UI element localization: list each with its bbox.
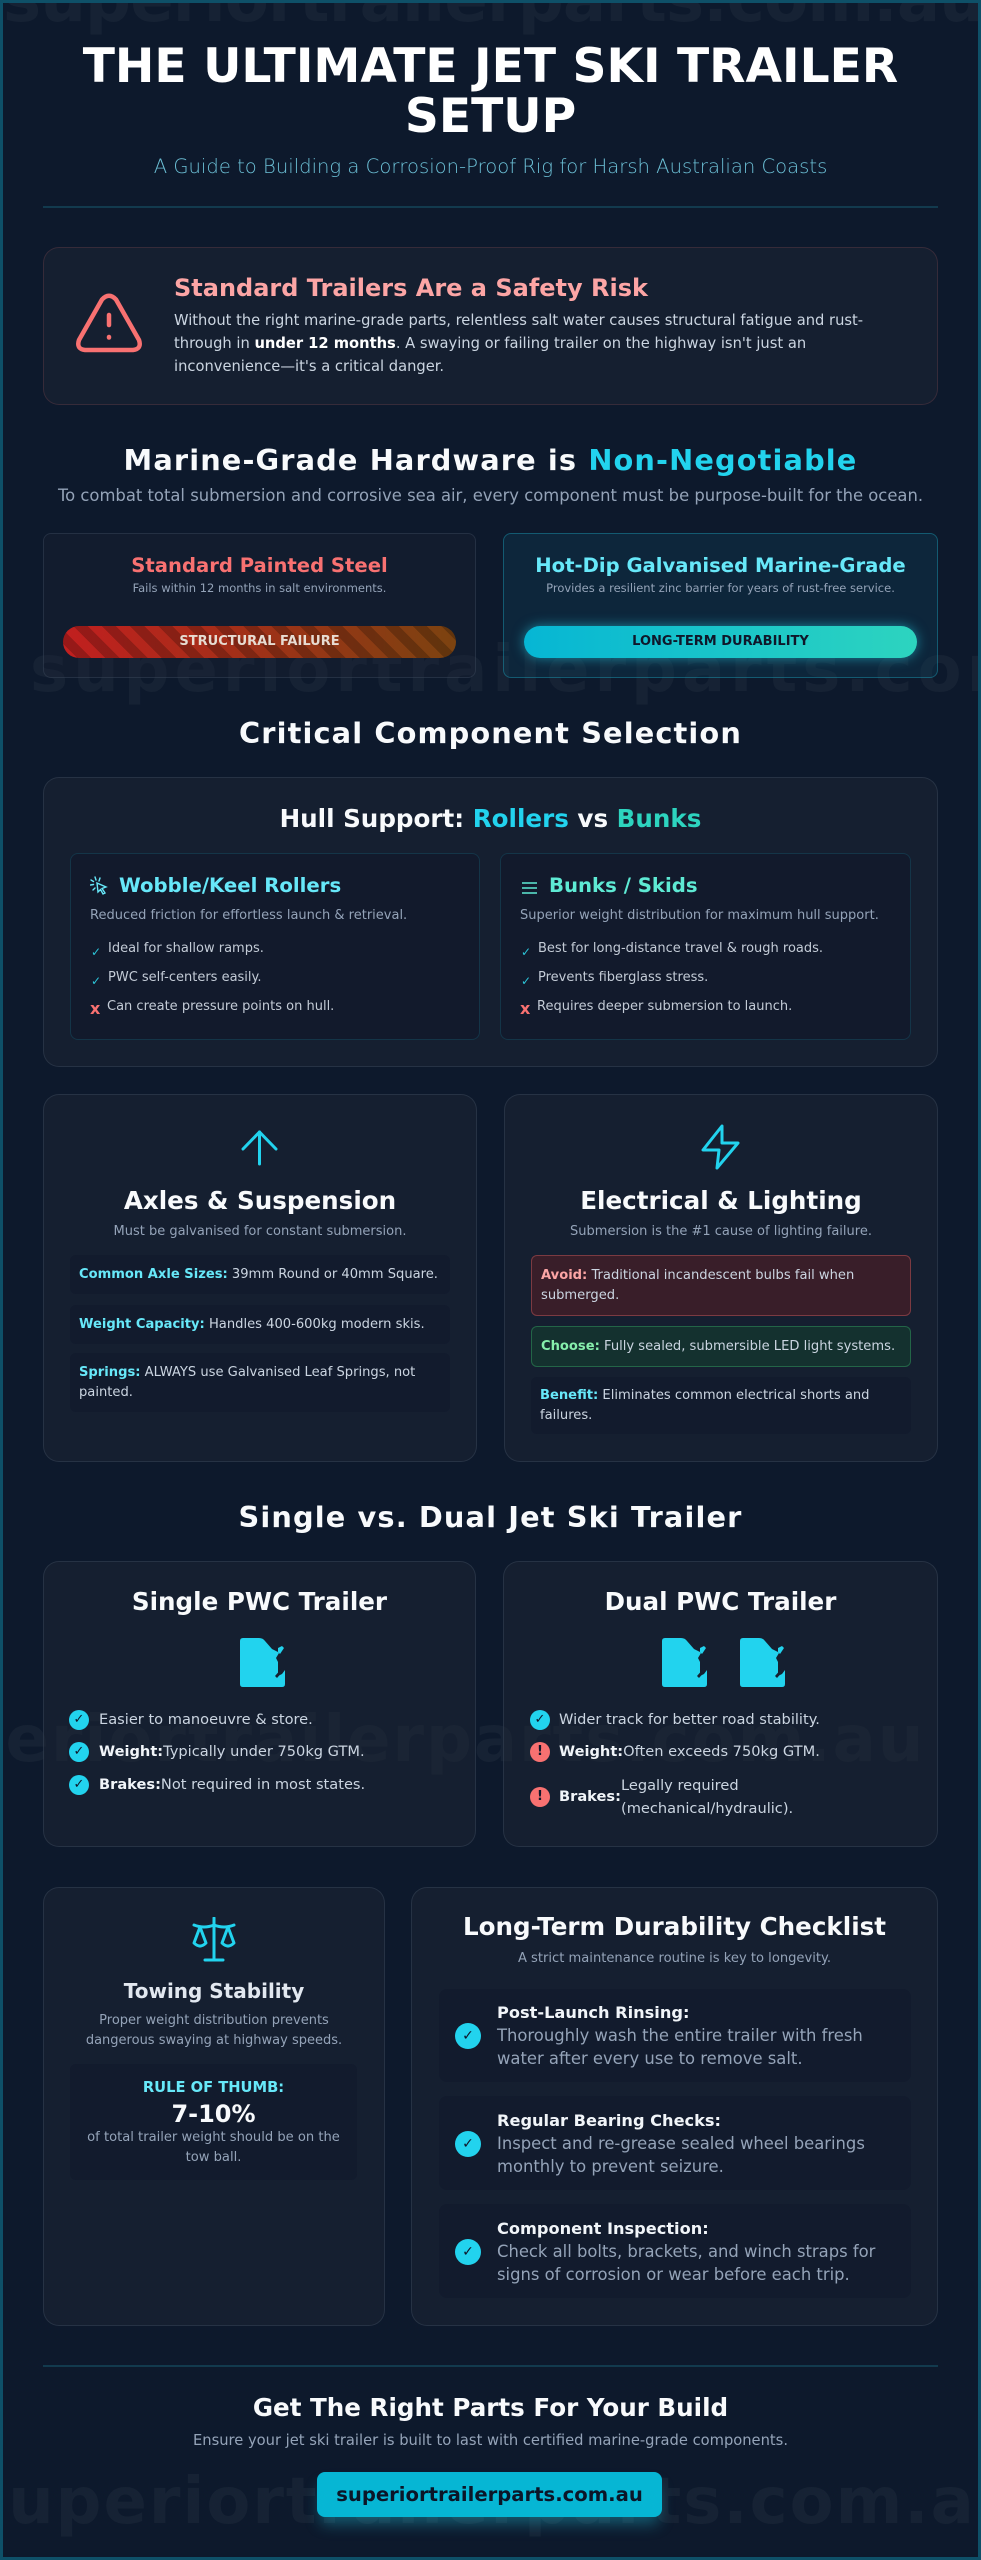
- checklist item: bearings: Inspect and re-grease sealed wheel bearings: [497, 2134, 865, 2153]
- footer description: Ensure your jet ski trailer is built to last with certified marine-grade components.: [193, 2432, 788, 2449]
- galvanised heading: Hot-Dip Galvanised Marine-Grade: [535, 554, 906, 577]
- rule of thumb box: [70, 2064, 357, 2180]
- panel: hot-dip galvanised: [503, 533, 938, 678]
- checklist item: rinsing: water after every use to remove salt.: [497, 2049, 803, 2068]
- icon: jet ski two: [740, 1638, 785, 1687]
- checklist item: inspection: Component Inspection:: [497, 2219, 709, 2238]
- hull support heading: Hull Support: Rollers vs Bunks: [280, 804, 701, 833]
- title: SETUP: [405, 89, 576, 144]
- checklist description: A strict maintenance routine is key to longevity.: [518, 1951, 831, 1966]
- benefit callout: Benefit: Eliminates common electrical shorts and: [540, 1388, 869, 1402]
- rollers description: Reduced friction for effortless launch & retrieval.: [90, 908, 407, 923]
- title: THE ULTIMATE JET SKI TRAILER: [83, 39, 898, 94]
- bunks pro 1: ✓: [521, 945, 531, 959]
- icon: balance scales: [192, 1917, 236, 1962]
- springs: [70, 1353, 450, 1412]
- bunks con: Requires deeper submersion to launch.: [537, 999, 792, 1014]
- panel: durability checklist: [411, 1887, 938, 2326]
- call to action button: superiortrailerparts.com.au: [336, 2483, 643, 2506]
- durability bar: [524, 626, 917, 658]
- icon: warning triangle: [76, 294, 142, 352]
- panel: safety risk alert: [43, 247, 938, 405]
- dual warning: brakes: Brakes:: [559, 1788, 621, 1805]
- electrical heading: Electrical & Lighting: [580, 1186, 862, 1215]
- section intro: To combat total submersion and corrosive sea air, every component must be purpose-built for the ocean.: [58, 486, 923, 505]
- rollers pro 2: ✓: [91, 974, 101, 988]
- towing description: Proper weight distribution prevents: [99, 2013, 329, 2028]
- benefit callout: [531, 1377, 911, 1434]
- single benefit: manoeuvre: ✓: [74, 1712, 84, 1727]
- rollers pro 1: ✓: [91, 945, 101, 959]
- rollers pro 1: Ideal for shallow ramps.: [108, 941, 264, 956]
- avoid callout: submerged.: [541, 1288, 619, 1302]
- title: [82, 39, 898, 144]
- icon: roller cursor: [90, 876, 108, 895]
- choose callout: Choose: Fully sealed, submersible LED light systems.: [541, 1338, 895, 1354]
- axles description: Must be galvanised for constant submersion.: [114, 1224, 406, 1239]
- icon: bunk lines: [522, 882, 537, 894]
- springs: painted.: [79, 1384, 133, 1400]
- checklist item: rinsing: [439, 1989, 911, 2082]
- axle sizes: Common Axle Sizes: 39mm Round or 40mm Square.: [79, 1266, 438, 1282]
- single heading: Single PWC Trailer: [132, 1587, 387, 1616]
- dual heading: Dual PWC Trailer: [605, 1587, 836, 1616]
- rule description: tow ball.: [186, 2150, 241, 2165]
- heading: single vs dual: Single vs. Dual Jet Ski Trailer: [239, 1500, 742, 1534]
- galvanised note: Provides a resilient zinc barrier for years of rust-free service.: [546, 581, 895, 595]
- dual warning: weight: !: [537, 1744, 543, 1759]
- dual benefit: stability: Wider track for better road stability.: [559, 1711, 820, 1728]
- footer heading: Get The Right Parts For Your Build: [253, 2393, 728, 2422]
- painted steel heading: Standard Painted Steel: [131, 554, 388, 577]
- icon: jet ski: [240, 1638, 285, 1687]
- rule description: of total trailer weight should be on the: [87, 2130, 340, 2145]
- rule label: RULE OF THUMB:: [143, 2079, 284, 2096]
- bunks heading: Bunks / Skids: [549, 874, 698, 897]
- weight capacity: Weight Capacity: Handles 400-600kg modern skis.: [79, 1316, 425, 1332]
- dual benefit: stability: ✓: [535, 1712, 545, 1727]
- sub-panel: rollers: [70, 853, 480, 1040]
- single benefit: weight: ✓: [74, 1744, 84, 1759]
- icon: lightning bolt: [701, 1124, 740, 1170]
- checklist item: bearings: Regular Bearing Checks:: [497, 2111, 721, 2130]
- choose callout: [531, 1326, 911, 1367]
- alert heading: Standard Trailers Are a Safety Risk: [174, 274, 648, 302]
- single benefit: brakes: Brakes:Not required in most states.: [99, 1776, 365, 1793]
- checklist item: inspection: [439, 2204, 911, 2298]
- alert body: [174, 312, 863, 375]
- bunks pro 2: ✓: [521, 974, 531, 988]
- dual warning: brakes: !: [537, 1789, 543, 1804]
- single benefit: manoeuvre: Easier to manoeuvre & store.: [99, 1711, 313, 1728]
- checklist item: bearings: monthly to prevent seizure.: [497, 2157, 724, 2176]
- panel: dual PWC trailer: [503, 1561, 938, 1847]
- avoid callout: Avoid: Traditional incandescent bulbs fail when: [541, 1268, 854, 1282]
- checklist item: inspection: ✓: [462, 2244, 474, 2260]
- checklist item: bearings: ✓: [462, 2136, 474, 2152]
- rollers heading: Wobble/Keel Rollers: [119, 874, 341, 897]
- single benefit: brakes: ✓: [74, 1777, 84, 1792]
- panel: standard painted steel: [43, 533, 476, 678]
- checklist item: rinsing: Post-Launch Rinsing:: [497, 2003, 689, 2022]
- avoid callout: [531, 1255, 911, 1316]
- panel: towing stability: [43, 1887, 385, 2326]
- dual warning: brakes: (mechanical/hydraulic).: [621, 1800, 793, 1817]
- painted steel note: Fails within 12 months in salt environments.: [133, 581, 386, 595]
- failure label: STRUCTURAL FAILURE: [179, 634, 340, 649]
- checklist heading: Long-Term Durability Checklist: [463, 1912, 886, 1941]
- rule description: [87, 2130, 340, 2165]
- alert body: Without the right marine-grade parts, relentless salt water causes structural fatigue and rust-: [174, 312, 863, 329]
- rollers pro 2: PWC self-centers easily.: [108, 970, 262, 985]
- heading: marine-grade hardware: Marine-Grade Hardware is Non-Negotiable: [124, 443, 857, 477]
- rollers con: Can create pressure points on hull.: [107, 999, 334, 1014]
- call to action button: [317, 2472, 662, 2517]
- sub-panel: bunks: [500, 853, 911, 1040]
- failure bar: [63, 626, 456, 658]
- dual warning: weight: Weight:Often exceeds 750kg GTM.: [559, 1743, 820, 1760]
- axle sizes: [70, 1255, 450, 1294]
- weight capacity: [70, 1305, 450, 1344]
- icon: jet ski one: [662, 1638, 707, 1687]
- bunks pro 2: Prevents fiberglass stress.: [538, 970, 708, 985]
- checklist item: bearings: [439, 2096, 911, 2190]
- alert body: through in under 12 months. A swaying or failing trailer on the highway isn't just an: [174, 335, 806, 352]
- benefit callout: failures.: [540, 1408, 592, 1422]
- checklist item: inspection: signs of corrosion or wear before each trip.: [497, 2265, 850, 2284]
- bunks con: x: [520, 999, 530, 1018]
- checklist item: rinsing: ✓: [462, 2028, 474, 2044]
- rule value: 7-10%: [171, 2100, 256, 2128]
- alert body: inconvenience—it's a critical danger.: [174, 358, 444, 375]
- panel: hull support: [43, 777, 938, 1067]
- towing heading: Towing Stability: [124, 1979, 304, 2003]
- springs: Springs: ALWAYS use Galvanised Leaf Springs, not: [79, 1364, 415, 1380]
- bunks description: Superior weight distribution for maximum hull support.: [520, 908, 879, 923]
- checklist item: inspection: Check all bolts, brackets, and winch straps for: [497, 2242, 875, 2261]
- panel: electrical and lighting: [504, 1094, 938, 1462]
- bunks pro 1: Best for long-distance travel & rough roads.: [538, 941, 823, 956]
- axles heading: Axles & Suspension: [124, 1186, 396, 1215]
- towing description: [86, 2013, 342, 2048]
- dual warning: brakes: [530, 1777, 793, 1817]
- panel: single PWC trailer: [43, 1561, 476, 1847]
- heading: critical component selection: Critical Component Selection: [239, 716, 742, 750]
- subtitle: A Guide to Building a Corrosion-Proof Rig for Harsh Australian Coasts: [154, 155, 827, 178]
- single benefit: weight: Weight:Typically under 750kg GTM.: [99, 1743, 365, 1760]
- checklist item: rinsing: Thoroughly wash the entire trailer with fresh: [497, 2026, 863, 2045]
- durability label: LONG-TERM DURABILITY: [632, 634, 809, 649]
- rollers con: x: [90, 999, 100, 1018]
- dual warning: brakes: Legally required: [621, 1777, 739, 1794]
- towing description: dangerous swaying at highway speeds.: [86, 2033, 342, 2048]
- electrical description: Submersion is the #1 cause of lighting failure.: [570, 1224, 872, 1239]
- panel: axles and suspension: [43, 1094, 477, 1462]
- icon: up arrow: [241, 1130, 278, 1166]
